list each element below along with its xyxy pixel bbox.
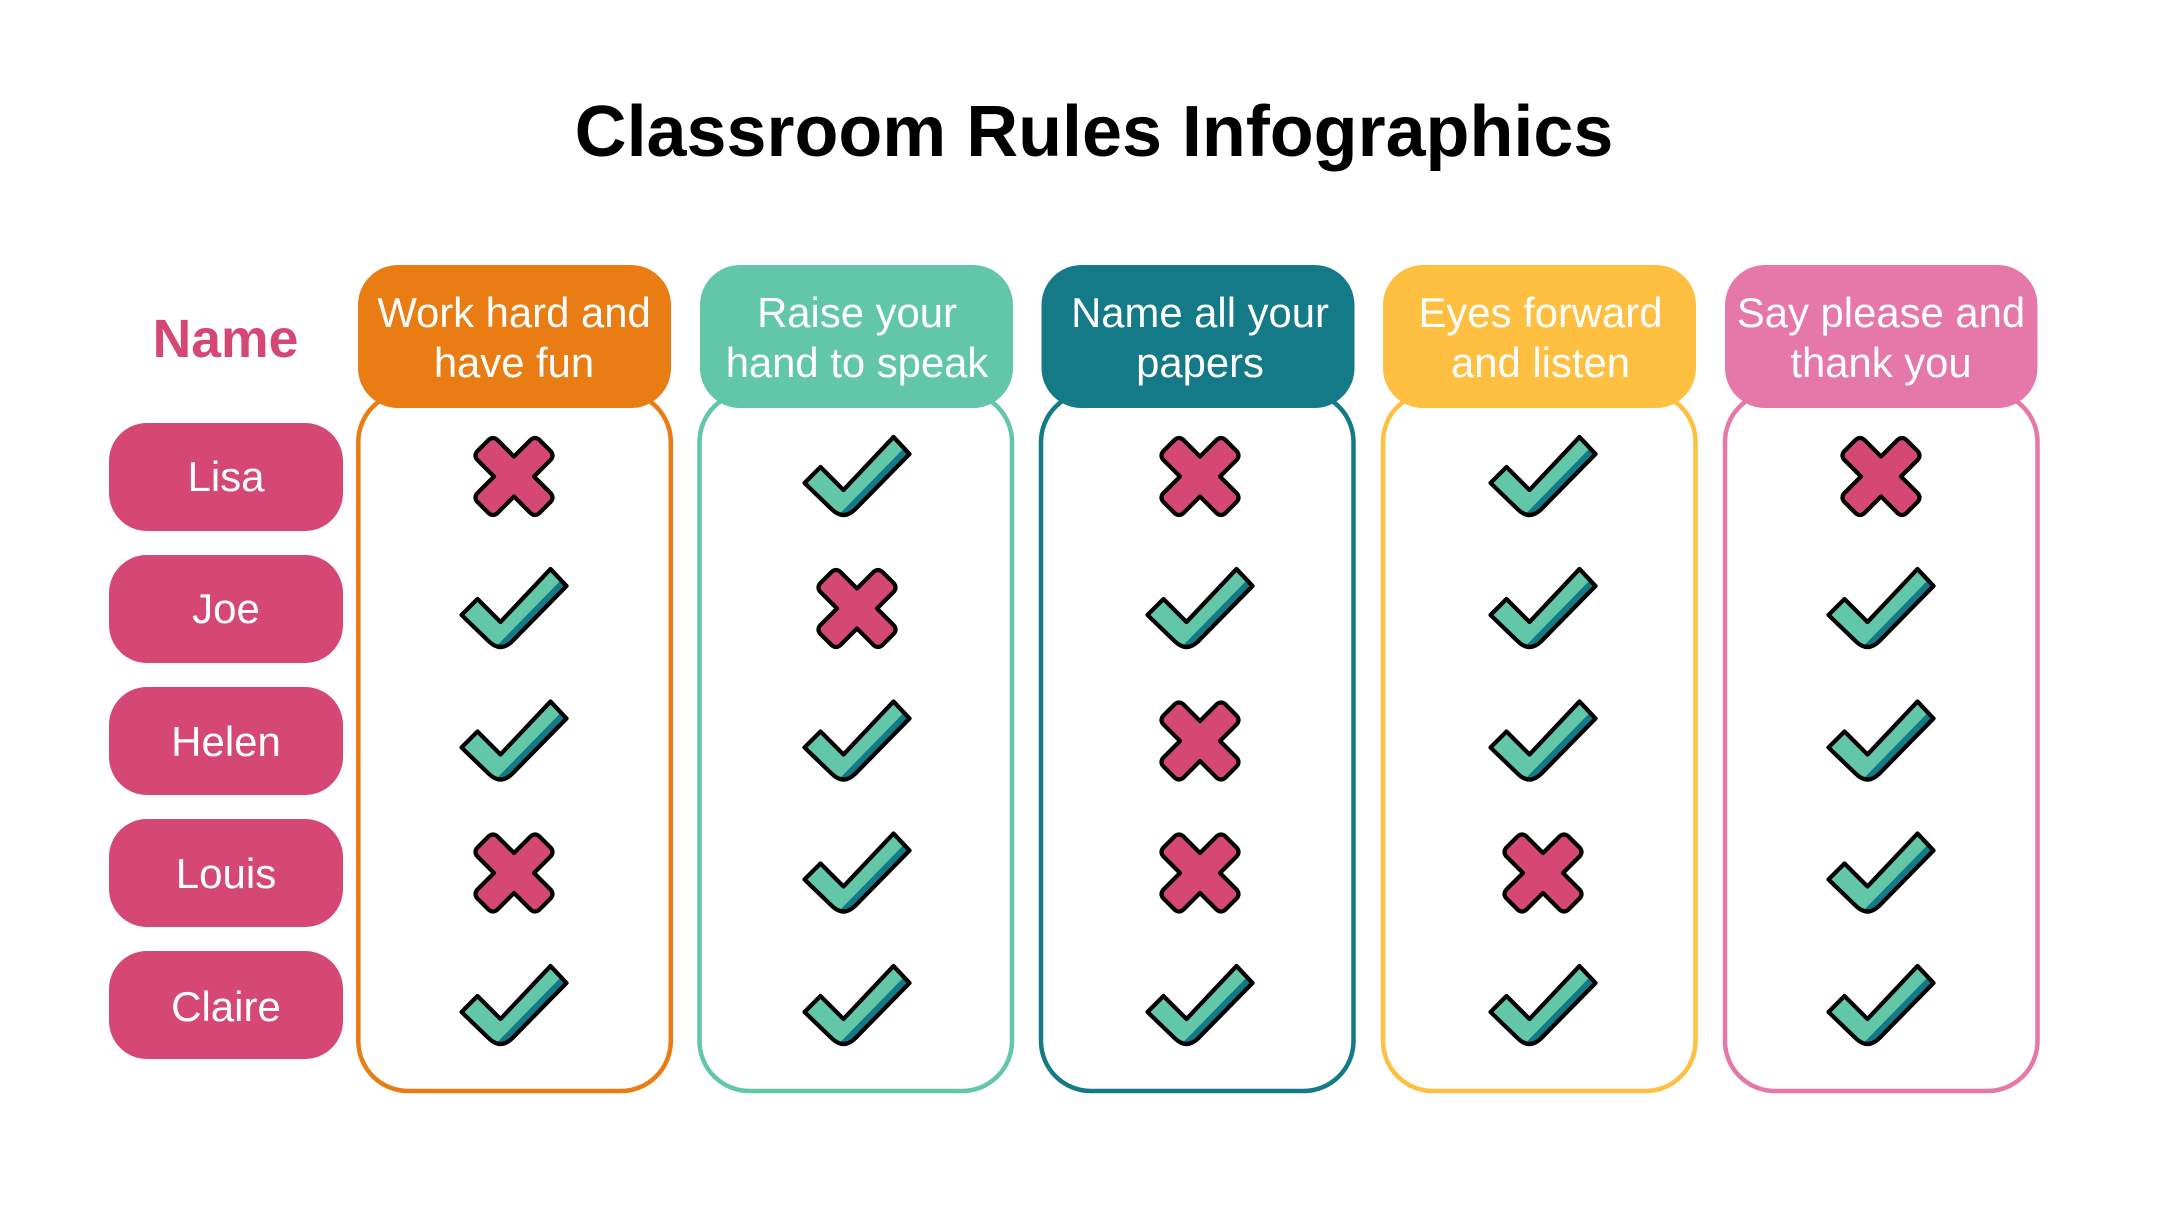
column frame bbox=[358, 392, 671, 1091]
name rows bbox=[109, 423, 343, 1059]
heading: Name: Name bbox=[153, 310, 298, 369]
icon: Lisa cross bbox=[476, 438, 552, 515]
column header bbox=[1042, 265, 1354, 408]
column frame bbox=[1725, 392, 2038, 1091]
panel: Eyes forward and listen bbox=[1383, 265, 1696, 1091]
icon: Joe check bbox=[1490, 569, 1596, 647]
name: Lisa: Lisa bbox=[187, 453, 265, 500]
column header: thank you bbox=[1790, 339, 1972, 386]
icon: Helen check bbox=[804, 702, 910, 780]
icon: Claire check bbox=[1148, 966, 1252, 1044]
column header bbox=[358, 265, 671, 408]
name: Claire bbox=[109, 951, 343, 1059]
panel: Raise your hand to speak bbox=[700, 265, 1013, 1091]
column header: Raise your bbox=[757, 289, 957, 336]
column header: papers bbox=[1136, 339, 1264, 386]
name: Claire: Claire bbox=[171, 983, 281, 1030]
icon: Louis cross bbox=[476, 834, 552, 912]
column header: Say please and bbox=[1737, 289, 2025, 336]
column header bbox=[700, 265, 1013, 408]
icon: Lisa cross bbox=[1162, 438, 1238, 515]
name: Joe bbox=[109, 555, 343, 663]
panel: Work hard and have fun bbox=[358, 265, 671, 1091]
icon: Claire check bbox=[1490, 966, 1596, 1044]
column frame bbox=[1041, 392, 1354, 1091]
icon: Louis cross bbox=[1504, 834, 1582, 912]
panel: Say please and thank you bbox=[1725, 265, 2038, 1091]
icon: Joe cross bbox=[818, 570, 896, 647]
icon: Lisa check bbox=[1490, 437, 1596, 515]
panel: Name all your papers bbox=[1041, 265, 1354, 1091]
icon: Joe check bbox=[1148, 569, 1252, 647]
name: Helen bbox=[109, 687, 343, 795]
column header: hand to speak bbox=[726, 339, 988, 386]
column frame bbox=[1383, 392, 1696, 1091]
icon: Helen check bbox=[1828, 702, 1934, 780]
icon: Louis check bbox=[1828, 834, 1934, 912]
column header bbox=[1383, 265, 1696, 408]
icon: Claire check bbox=[462, 966, 566, 1044]
icon: Louis cross bbox=[1162, 834, 1238, 912]
icon: Claire check bbox=[1828, 966, 1934, 1044]
column frame bbox=[700, 392, 1012, 1091]
name: Joe: Joe bbox=[192, 585, 260, 632]
icon: Lisa check bbox=[804, 437, 910, 515]
icon: Helen check bbox=[1490, 702, 1596, 780]
icon: Helen cross bbox=[1162, 702, 1238, 780]
column header bbox=[1725, 265, 2038, 408]
icon: Claire check bbox=[804, 966, 910, 1044]
name: Lisa bbox=[109, 423, 343, 531]
name: Helen: Helen bbox=[171, 718, 281, 765]
column header: Work hard and bbox=[377, 289, 651, 336]
icon: Lisa cross bbox=[1842, 438, 1920, 515]
title: Classroom Rules Infographics bbox=[575, 92, 1613, 172]
name: Louis bbox=[109, 819, 343, 927]
column header: have fun bbox=[434, 339, 594, 386]
column header: Eyes forward bbox=[1419, 289, 1662, 336]
column header: Name all your bbox=[1071, 289, 1329, 336]
icon: Joe check bbox=[1828, 569, 1934, 647]
name: Louis: Louis bbox=[176, 850, 276, 897]
icon: Louis check bbox=[804, 834, 910, 912]
icon: Joe check bbox=[462, 569, 566, 647]
icon: Helen check bbox=[462, 702, 566, 780]
column header: and listen bbox=[1451, 339, 1630, 386]
